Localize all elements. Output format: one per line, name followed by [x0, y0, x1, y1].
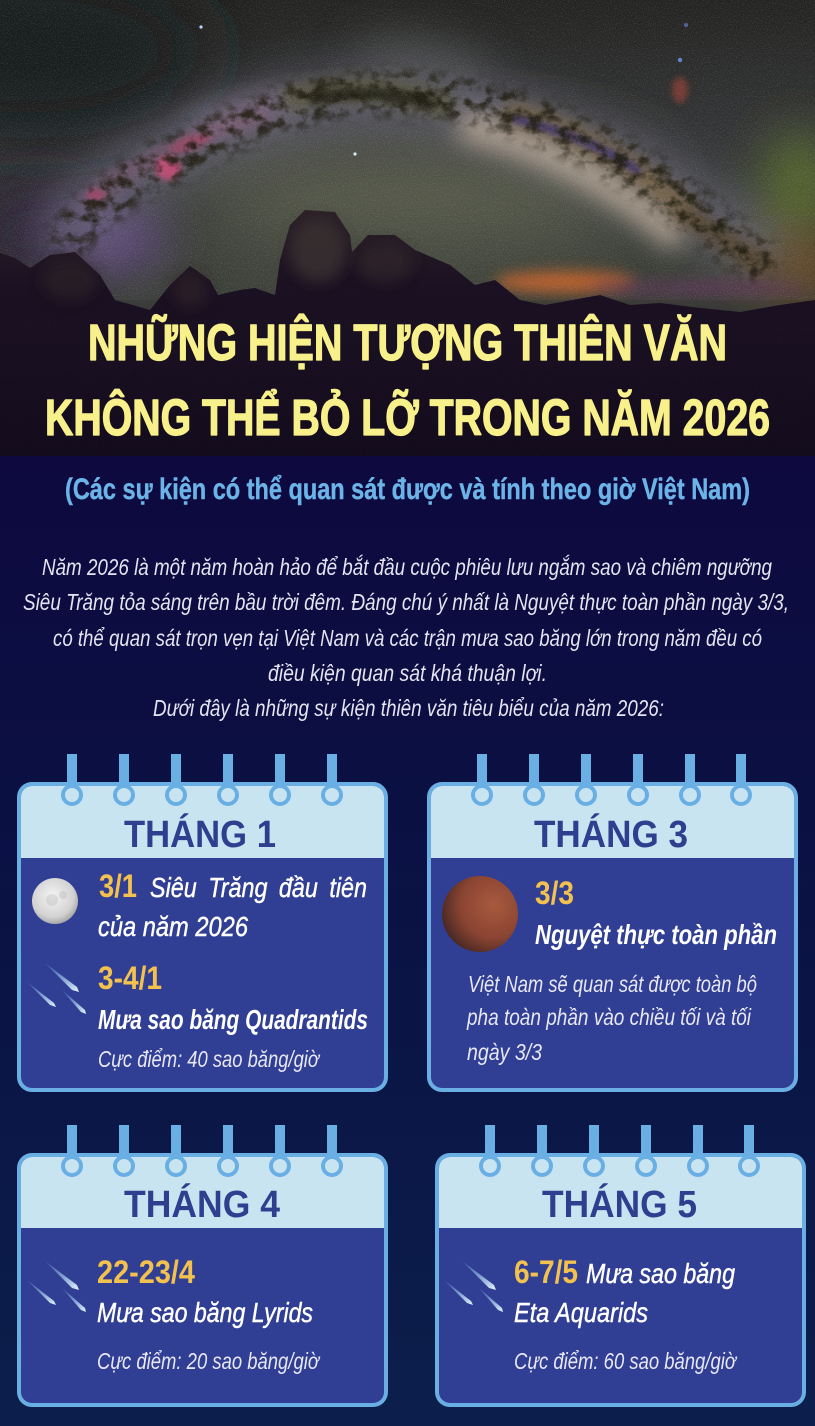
icon: meteors — [444, 1261, 503, 1312]
month heading: THÁNG 5 — [542, 1182, 697, 1226]
event: total lunar eclipse — [535, 875, 777, 950]
event: Lyrids: Mưa sao băng Lyrids — [97, 1297, 313, 1328]
binder rings — [481, 1125, 758, 1175]
event: supermoon — [98, 868, 367, 942]
intro paragraph: Dưới đây là những sự kiện thiên văn tiêu biểu của năm 2026: — [153, 695, 664, 721]
event: Quadrantids: Mưa sao băng Quadrantids — [98, 1004, 368, 1035]
event: Eta Aquarids — [514, 1254, 738, 1374]
icon: meteors — [27, 1261, 86, 1312]
month heading: THÁNG 4 — [124, 1182, 280, 1226]
binder rings — [63, 754, 341, 804]
month heading: THÁNG 3 — [534, 812, 688, 856]
intro paragraph — [23, 554, 789, 721]
icon: blood moon — [442, 876, 518, 952]
month heading: THÁNG 1 — [124, 812, 276, 856]
event: supermoon: Siêu Trăng đầu tiên — [150, 872, 367, 903]
binder rings — [473, 754, 750, 804]
event: Quadrantids — [98, 960, 368, 1072]
title — [45, 313, 770, 446]
event: Quadrantids: Cực điểm: 40 sao băng/giờ — [98, 1046, 321, 1072]
event: Quadrantids: 3-4/1 — [98, 960, 162, 996]
icon: meteors — [27, 963, 86, 1014]
intro paragraph: điều kiện quan sát khá thuận lợi. — [268, 660, 547, 686]
event: Eta Aquarids: Eta Aquarids — [514, 1297, 648, 1328]
event: Lyrids: Cực điểm: 20 sao băng/giờ — [97, 1348, 321, 1374]
eclipse note: pha toàn phần vào chiều tối và tối — [466, 1004, 752, 1030]
event: Lyrids: 22-23/4 — [97, 1254, 195, 1290]
hero photo: Milky Way over rocks — [0, 0, 815, 460]
event: supermoon: của năm 2026 — [98, 911, 248, 942]
icon: full moon — [32, 878, 78, 924]
event: Eta Aquarids: Cực điểm: 60 sao băng/giờ — [514, 1348, 738, 1374]
panel: month 1 — [19, 754, 386, 1090]
panel: month 3 — [429, 754, 796, 1090]
event: total lunar eclipse: 3/3 — [535, 875, 574, 911]
eclipse note: ngày 3/3 — [467, 1039, 542, 1065]
eclipse note — [466, 971, 757, 1065]
panel: month 5 — [437, 1125, 804, 1405]
event: supermoon: 3/1 — [99, 868, 137, 904]
event: Eta Aquarids: 6-7/5 — [514, 1254, 578, 1290]
event: Lyrids — [97, 1254, 321, 1374]
binder rings — [63, 1125, 341, 1175]
panel: month 4 — [19, 1125, 386, 1405]
event: Eta Aquarids: Mưa sao băng — [586, 1258, 735, 1289]
